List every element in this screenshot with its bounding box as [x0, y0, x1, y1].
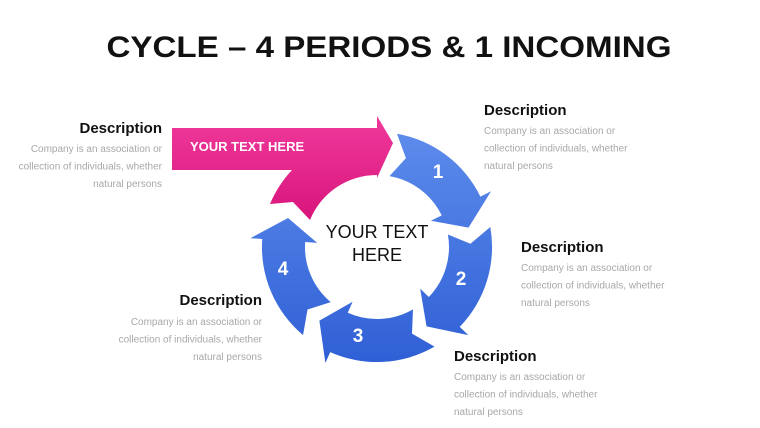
description top-right — [484, 102, 628, 172]
center text: HERE — [352, 245, 402, 265]
description bottom-left: natural persons — [193, 352, 262, 363]
description bottom-left — [119, 292, 263, 363]
description bottom-right: collection of individuals, whether — [454, 390, 598, 400]
description top-left: Company is an association or — [31, 144, 162, 155]
description top-left: natural persons — [93, 179, 162, 190]
pink arrow label: YOUR TEXT HERE — [190, 139, 304, 154]
description bottom-right: natural persons — [454, 407, 523, 418]
description bottom-right: Company is an association or — [454, 372, 585, 383]
description top-right: natural persons — [484, 161, 553, 172]
description bottom-right: Description — [454, 348, 537, 365]
description top-left: Description — [79, 120, 162, 137]
description right — [521, 239, 665, 309]
arrow 1 — [390, 134, 491, 228]
description top-left — [19, 120, 163, 190]
title: CYCLE – 4 PERIODS & 1 INCOMING — [106, 31, 672, 64]
description bottom-left: Company is an association or — [131, 317, 262, 328]
number 1: 1 — [433, 162, 444, 183]
number 2: 2 — [456, 269, 466, 290]
center text: YOUR TEXT — [326, 222, 428, 242]
description bottom-right — [454, 348, 598, 418]
incoming pink arrow — [172, 116, 393, 220]
description right: Description — [521, 239, 604, 256]
number 4: 4 — [278, 259, 289, 280]
description top-right: Company is an association or — [484, 126, 615, 137]
description right: natural persons — [521, 298, 590, 309]
description bottom-left: Description — [179, 292, 262, 309]
description top-left: collection of individuals, whether — [19, 162, 163, 172]
description right: Company is an association or — [521, 263, 652, 274]
arrow 2 — [400, 220, 522, 348]
arrow 3 — [302, 270, 440, 407]
number 3: 3 — [353, 326, 363, 347]
description bottom-left: collection of individuals, whether — [119, 334, 263, 346]
description right: collection of individuals, whether — [521, 280, 665, 292]
description top-right: Description — [484, 102, 567, 119]
arrow 4 — [222, 207, 356, 339]
description top-right: collection of individuals, whether — [484, 144, 628, 154]
cycle diagram — [172, 116, 522, 407]
